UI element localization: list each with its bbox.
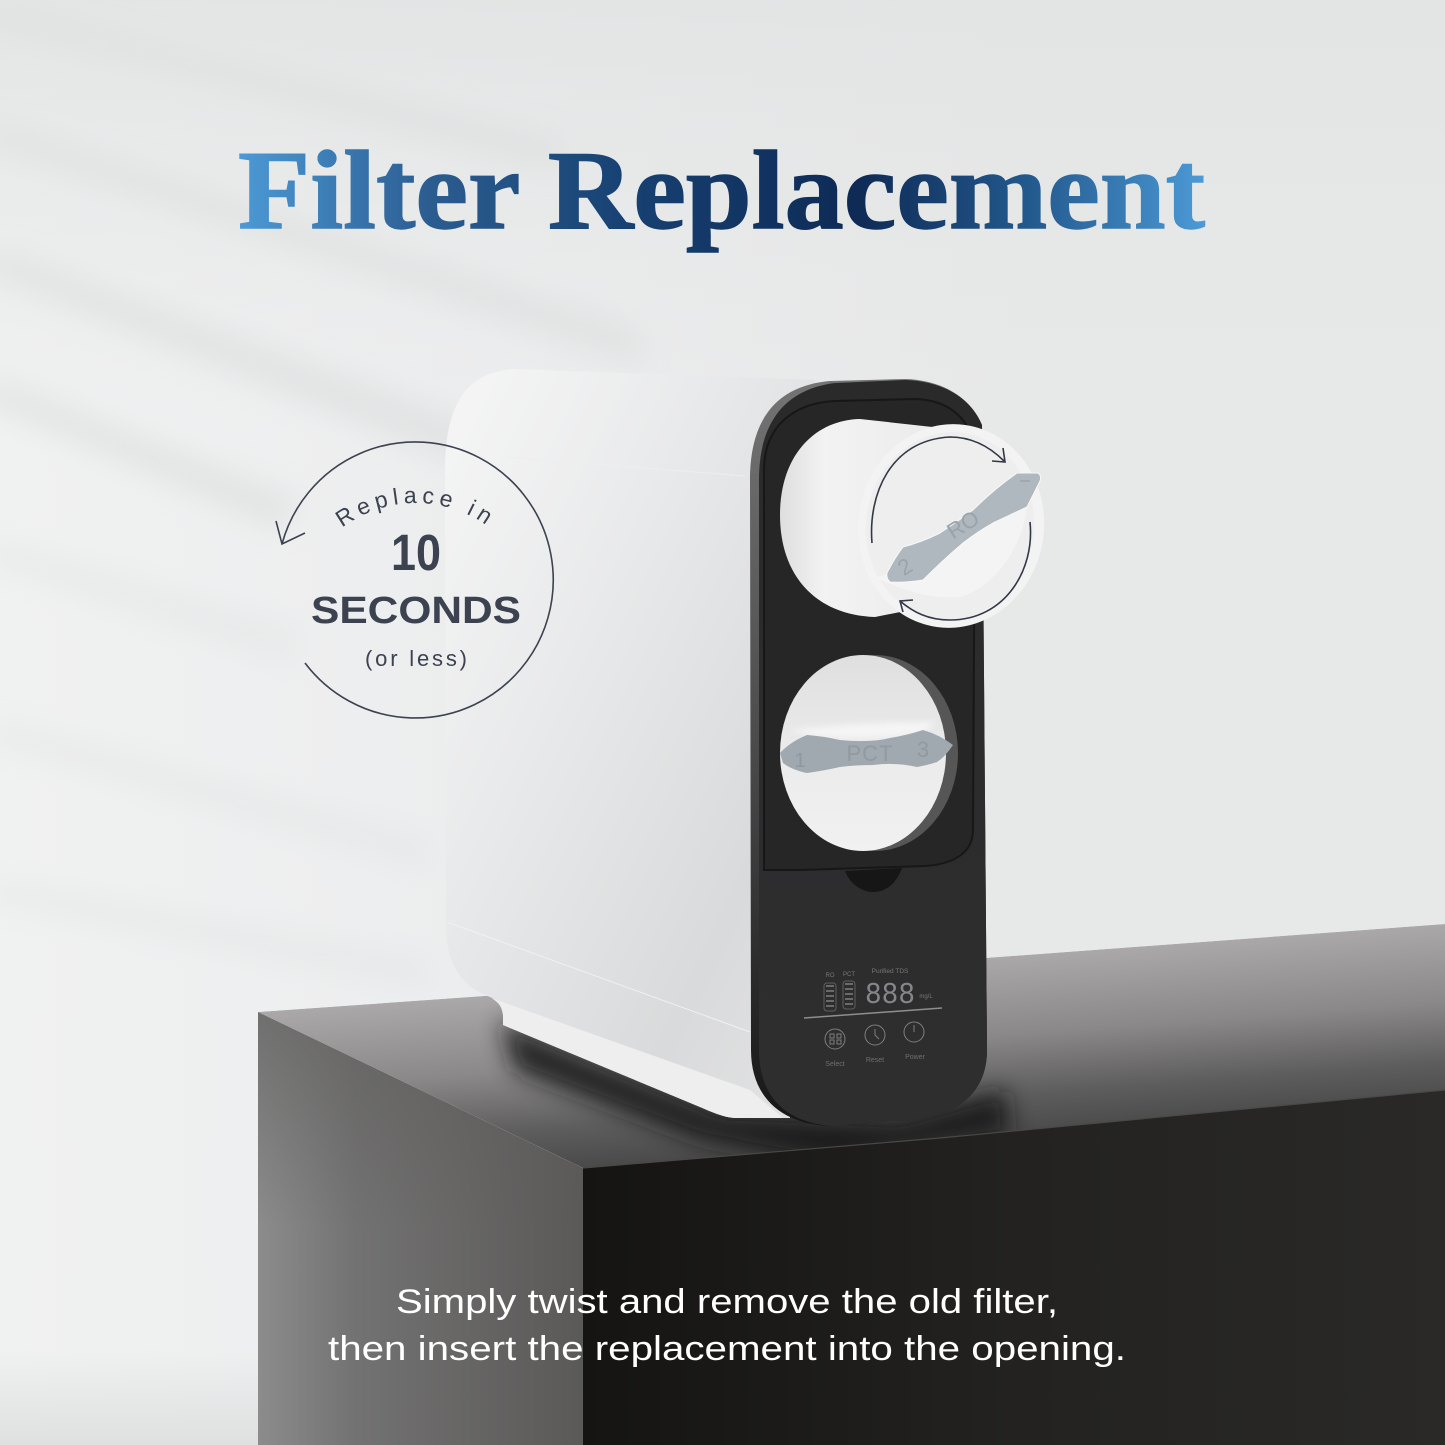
lower knob handle: 1 bbox=[794, 750, 806, 772]
circular arrow bbox=[276, 442, 553, 718]
pedestal right face bbox=[583, 1090, 1445, 1445]
upper filter handle: 2 bbox=[893, 553, 917, 580]
curved label: Replace in bbox=[335, 488, 490, 526]
lower knob handle: PCT bbox=[846, 741, 894, 766]
number: 10 bbox=[391, 524, 441, 581]
upper filter cylinder bbox=[780, 412, 1057, 640]
pedestal left face bbox=[258, 1012, 583, 1445]
pedestal top face bbox=[258, 924, 1445, 1168]
instruction text bbox=[328, 1283, 1126, 1368]
lower knob handle bbox=[780, 730, 953, 773]
callout: replace in 10 seconds bbox=[275, 441, 554, 719]
control display bbox=[804, 968, 942, 1068]
qualifier: (or less) bbox=[365, 646, 467, 671]
device body bbox=[445, 369, 815, 1118]
unit: SECONDS bbox=[311, 590, 521, 632]
device front panel bbox=[750, 379, 987, 1126]
instruction text: then insert the replacement into the opening. bbox=[328, 1330, 1126, 1368]
upper filter handle bbox=[887, 473, 1041, 582]
control display: mg/L bbox=[919, 994, 933, 1000]
title: Filter Replacement bbox=[238, 129, 1205, 253]
control display: Power bbox=[905, 1054, 926, 1061]
rotation arrows on the filter bbox=[872, 437, 1031, 620]
control display: Select bbox=[825, 1061, 845, 1068]
control display: Purified TDS bbox=[872, 968, 909, 975]
lower filter knob bbox=[780, 655, 958, 851]
water purifier device bbox=[445, 369, 1057, 1126]
control display: PCT bbox=[843, 972, 855, 978]
upper filter handle: RO bbox=[942, 505, 984, 544]
control display: 888 bbox=[865, 978, 915, 1013]
black pedestal bbox=[258, 924, 1445, 1445]
control display: Reset bbox=[866, 1057, 884, 1064]
control display: RO bbox=[826, 973, 835, 979]
instruction text: Simply twist and remove the old filter, bbox=[396, 1283, 1058, 1321]
lower knob handle: 3 bbox=[917, 737, 929, 762]
